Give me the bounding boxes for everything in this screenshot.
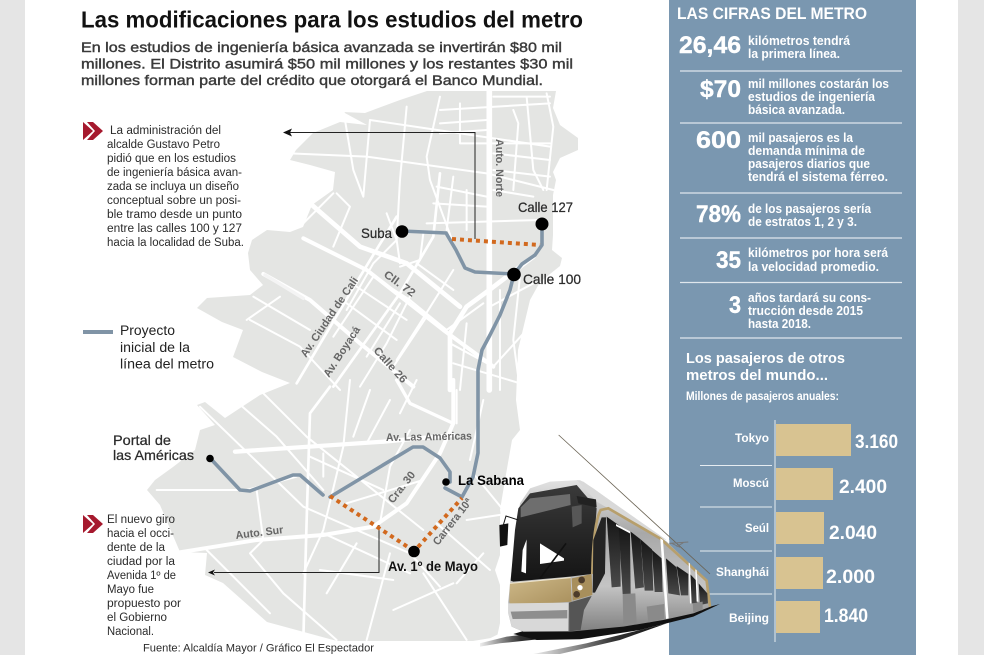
pantograph	[669, 542, 688, 547]
bar chart: annual passengers: 2.040	[829, 523, 877, 544]
callout: Av. 1º de Mayo text: El nuevo giro	[107, 514, 175, 526]
figure: 78%: 78%	[696, 201, 741, 228]
tram body	[508, 480, 711, 632]
figure: 78%: de los pasajeros sería	[748, 202, 872, 216]
road labels: Av. Boyacá	[321, 324, 364, 380]
station labels: Calle 100	[523, 271, 581, 287]
map landmass	[147, 91, 578, 641]
station labels: Av. 1º de Mayo	[388, 559, 478, 574]
figure: $70: básica avanzada.	[748, 103, 845, 117]
station labels: las Américas	[113, 447, 194, 463]
road labels: Auto. Sur	[235, 524, 285, 542]
station labels: Suba	[361, 225, 392, 241]
road labels: Cra. 30	[386, 469, 418, 506]
road labels: Av. Ciudad de Cali	[299, 275, 361, 360]
legend: initial metro line: Proyecto	[120, 323, 175, 338]
panel heading: LAS CIFRAS DEL METRO	[677, 5, 867, 23]
figure: $70	[700, 76, 889, 117]
figure: 35 km/h: 35	[716, 247, 741, 274]
figure: 26,46 km: kilómetros tendrá	[748, 34, 850, 48]
bar chart: annual passengers: 2.400	[839, 477, 887, 498]
figure: 78%	[696, 201, 872, 229]
gold front panel	[509, 574, 592, 606]
headlights	[573, 577, 585, 598]
destination sign	[577, 496, 597, 507]
figure: 3 years: hasta 2018.	[748, 317, 811, 331]
route: proposed orange variants	[330, 239, 540, 551]
callout: Av. 1º de Mayo text: hacia el occi-	[107, 528, 174, 540]
figure: 35 km/h: kilómetros por hora será	[748, 246, 888, 260]
figure: 3 years	[729, 291, 871, 331]
gold side stripe	[592, 508, 710, 607]
windshield	[511, 485, 597, 582]
bar chart heading	[686, 350, 845, 403]
figure: $70: $70	[700, 76, 741, 103]
callout: Av. 1º de Mayo text: dente de la	[107, 542, 166, 554]
arrow: north callout leader	[283, 128, 475, 239]
door lines and white stripes	[616, 524, 698, 619]
figure: $70: mil millones costarán los	[748, 77, 889, 91]
figure: 26,46 km: la primera línea.	[748, 47, 840, 61]
intro text block: millones forman parte del crédito que otorgará el Banco Mundial.	[81, 72, 543, 88]
bar chart: annual passengers: 3.160	[855, 432, 898, 453]
callout: Suba branch text	[107, 125, 244, 249]
legend: initial metro line: línea del metro	[120, 356, 214, 372]
figure: 600: tendrá el sistema férreo.	[748, 170, 888, 184]
arrow: south callout leader	[208, 525, 379, 576]
wiper	[540, 543, 566, 578]
figure: 26,46 km: 26,46	[679, 32, 741, 59]
callout: Suba branch text: entre las calles 100 y 127	[107, 223, 242, 235]
interior mirror	[572, 505, 582, 527]
callout: Suba branch text: pidió que en los estudios	[107, 153, 236, 165]
road labels: Auto. Norte	[493, 139, 505, 197]
side mirror	[499, 516, 518, 547]
station labels: Calle 127	[518, 199, 573, 215]
rails	[480, 623, 667, 654]
bar chart heading: Millones de pasajeros anuales:	[686, 391, 839, 403]
figure: 600	[696, 127, 888, 184]
callout: Suba branch text: hacia la localidad de Suba.	[107, 237, 244, 249]
callout: Av. 1º de Mayo text: Nacional.	[107, 626, 154, 638]
callout: Av. 1º de Mayo text	[107, 514, 181, 638]
station labels: La Sabana	[458, 473, 524, 488]
figure: 3 years: años tardará su cons-	[748, 291, 871, 305]
bar chart: annual passengers	[700, 420, 898, 642]
callout: Suba branch text: La administración del	[110, 125, 221, 137]
route: initial metro line	[210, 224, 542, 497]
station dots	[206, 218, 548, 557]
tram shadow	[513, 604, 720, 640]
callout: Suba branch text: de ingeniería básica avan-	[107, 167, 242, 179]
figure: $70: estudios de ingeniería	[748, 90, 876, 104]
bar chart: annual passengers: 2.000	[826, 567, 875, 588]
doors lower	[623, 593, 703, 624]
icon: red chevrons south callout	[83, 515, 103, 533]
windshield upper band	[521, 494, 571, 517]
bar chart: annual passengers: 1.840	[824, 606, 868, 627]
road labels: Cll. 72	[381, 269, 417, 300]
map of Bogotá	[147, 90, 578, 641]
overhead wire	[559, 435, 710, 574]
callout: Suba branch text: zada se incluya un diseño	[107, 181, 239, 193]
figure: 600: pasajeros diarios que	[748, 157, 870, 171]
bar chart heading: Los pasajeros de otros	[686, 350, 845, 367]
intro text block: En los estudios de ingeniería básica avanzada se invertirán $80 mil	[81, 39, 562, 55]
intro text block	[81, 39, 573, 88]
legend: initial metro line	[83, 323, 214, 372]
figure: 26,46 km	[679, 32, 850, 61]
panel: metro figures	[669, 0, 916, 655]
road labels	[235, 139, 505, 548]
figure: 3 years: trucción desde 2015	[748, 304, 863, 318]
road labels: Av. Las Américas	[386, 431, 472, 444]
figure: 35 km/h	[716, 246, 888, 274]
cab side window	[593, 517, 606, 593]
figure: 78%: de estratos 1, 2 y 3.	[748, 215, 857, 229]
white mask behind tram	[480, 473, 669, 655]
legend: initial metro line: inicial de la	[120, 340, 191, 355]
source note: Fuente: Alcaldía Mayor / Gráfico El Espectador	[143, 642, 374, 654]
bar chart: annual passengers: Beijing	[729, 611, 769, 625]
station labels: Portal de	[113, 432, 171, 448]
windshield reflections	[521, 539, 564, 573]
bar chart: annual passengers: Seúl	[745, 521, 769, 535]
illustration: tram on rails	[480, 435, 720, 655]
callout: Suba branch text: ble tramo desde un punto	[107, 209, 242, 221]
figure: 600: 600	[696, 127, 741, 154]
bar chart: annual passengers: Moscú	[733, 476, 769, 490]
road labels: Carrera 10ª	[431, 496, 475, 548]
callout: Suba branch text: conceptual sobre un posi-	[107, 195, 241, 207]
callout: Suba branch text: alcalde Gustavo Petro	[107, 139, 220, 151]
figure: 600: demanda mínima de	[748, 144, 865, 158]
figure: 3 years: 3	[729, 292, 741, 319]
title: Las modificaciones para los estudios del metro	[81, 6, 583, 32]
callout: Av. 1º de Mayo text: ciudad por la	[107, 556, 176, 568]
street network north	[247, 90, 553, 390]
street network south	[157, 380, 510, 640]
callout: Av. 1º de Mayo text: Mayo fue	[107, 584, 154, 596]
intro text block: millones. El Distrito asumirá $50 mil millones y los restantes $30 mil	[81, 56, 573, 72]
figure: 35 km/h: la velocidad promedio.	[748, 260, 879, 274]
callout: Av. 1º de Mayo text: propuesto por	[107, 598, 181, 610]
icon: red chevrons north callout	[83, 122, 103, 140]
lower front bumper	[508, 596, 592, 632]
bar chart: annual passengers: Shanghái	[716, 565, 769, 579]
side windows	[607, 517, 708, 605]
figure: 600: mil pasajeros es la	[748, 131, 854, 145]
bar chart heading: metros del mundo...	[686, 367, 828, 384]
roof highlight	[577, 480, 667, 540]
callout: Av. 1º de Mayo text: el Gobierno	[107, 612, 167, 624]
station labels	[113, 199, 581, 574]
figure separators	[680, 71, 902, 338]
callout: Av. 1º de Mayo text: Avenida 1º de	[107, 570, 176, 582]
bar chart: annual passengers: Tokyo	[735, 431, 769, 445]
road labels: Calle 26	[371, 345, 409, 386]
